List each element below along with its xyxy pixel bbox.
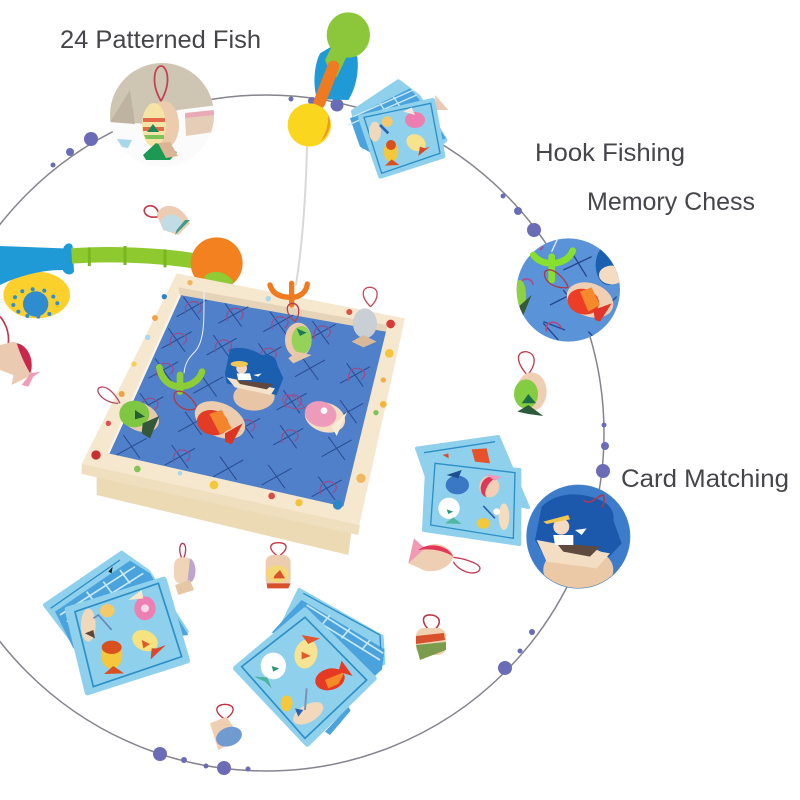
wood piece bbox=[435, 95, 448, 110]
back card bbox=[45, 553, 187, 647]
small fish upper left bbox=[144, 206, 190, 235]
pink fish bbox=[408, 538, 480, 573]
fishing line top bbox=[296, 145, 307, 285]
back pattern bbox=[348, 88, 446, 160]
red fish bbox=[174, 391, 251, 446]
green fish bbox=[98, 387, 164, 438]
cards top bbox=[348, 82, 448, 176]
reel bbox=[3, 272, 70, 319]
back pattern bbox=[51, 560, 188, 648]
front card bbox=[67, 579, 187, 693]
pink fish bbox=[283, 395, 349, 438]
green striped fish bbox=[285, 303, 312, 363]
right callout: hook and fish bbox=[516, 238, 620, 342]
standing fish pieces bbox=[174, 543, 291, 750]
frame decorations bbox=[91, 280, 395, 510]
cards bottom left bbox=[45, 553, 188, 693]
piece B bbox=[266, 543, 291, 588]
piece C bbox=[210, 704, 245, 750]
orange hook bbox=[270, 283, 307, 305]
back card bbox=[353, 82, 445, 147]
fishing line bbox=[184, 290, 204, 373]
cards right bbox=[408, 437, 528, 573]
front card bbox=[424, 463, 519, 544]
boat piece bbox=[225, 348, 283, 411]
front card bbox=[236, 610, 374, 744]
heading: Card Matching: Card Matching bbox=[621, 465, 789, 493]
front card bbox=[361, 101, 443, 176]
frame lip bbox=[82, 463, 360, 535]
loop bbox=[544, 270, 568, 288]
float bbox=[191, 237, 243, 289]
heading: Memory Chess: Memory Chess bbox=[587, 188, 755, 216]
grey fish bbox=[352, 287, 377, 347]
head bbox=[327, 12, 370, 58]
back card bbox=[417, 437, 528, 507]
shaft bbox=[319, 67, 333, 103]
rod bbox=[72, 255, 193, 261]
cards bottom centre bbox=[236, 590, 385, 744]
board bbox=[82, 273, 405, 555]
ball bbox=[288, 103, 331, 147]
fishing rod top bbox=[288, 12, 370, 147]
orbit ring bbox=[0, 95, 610, 775]
grip bbox=[314, 43, 358, 100]
grid marks bbox=[117, 297, 370, 500]
green hook bbox=[159, 367, 202, 392]
back card bbox=[280, 590, 383, 663]
water bbox=[108, 295, 386, 507]
photo callout: patterned fish bbox=[110, 63, 214, 160]
heading: 24 Patterned Fish: 24 Patterned Fish bbox=[60, 26, 261, 54]
small green fish right bbox=[514, 352, 547, 416]
small fish far left bbox=[0, 317, 41, 387]
red fish bbox=[562, 276, 618, 324]
box side bbox=[97, 472, 352, 555]
frame top bbox=[82, 273, 405, 525]
small fish piece lower right bbox=[416, 615, 446, 660]
back pattern bbox=[272, 593, 385, 735]
right callout: boat piece bbox=[527, 485, 630, 594]
piece A bbox=[174, 543, 195, 595]
handle bbox=[0, 243, 74, 285]
fishing rod left bbox=[0, 237, 243, 319]
heading: Hook Fishing: Hook Fishing bbox=[535, 139, 685, 167]
hook bbox=[533, 251, 573, 280]
